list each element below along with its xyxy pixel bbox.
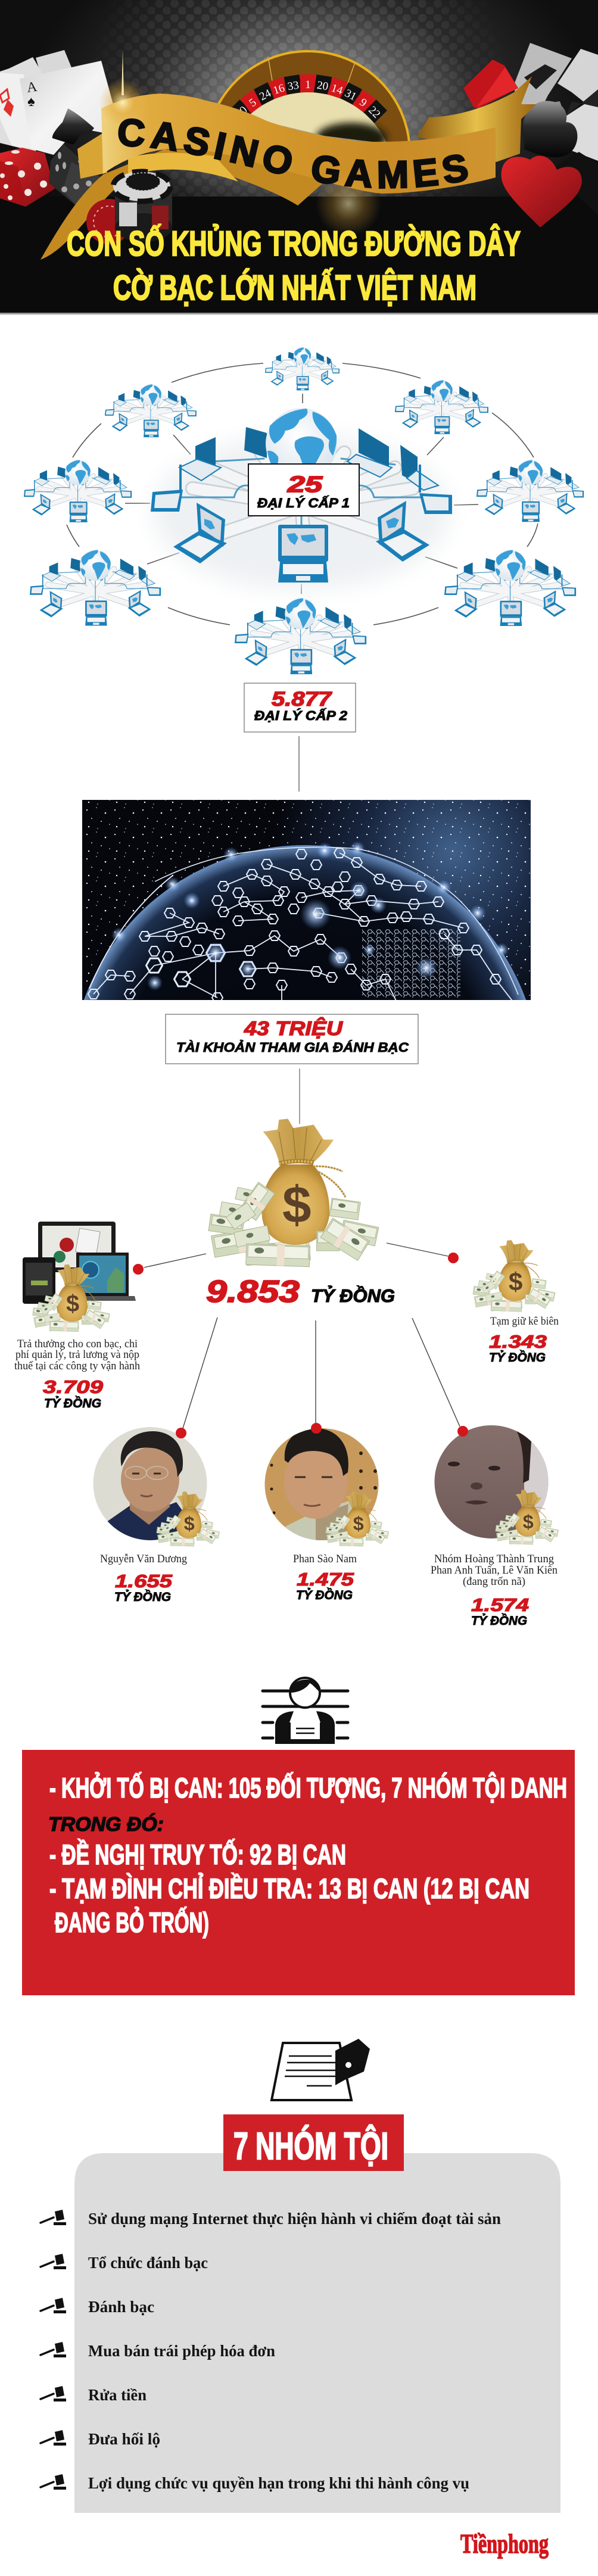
amount 3.709 — [43, 1376, 104, 1410]
payout caption: phí quản lý, trả lương và nộp — [15, 1348, 139, 1361]
total amount — [206, 1275, 395, 1309]
satellite clusters — [24, 347, 584, 674]
dice — [0, 144, 101, 208]
red dot left — [133, 1264, 144, 1275]
red dot right — [448, 1253, 459, 1263]
box: 5.877 second level agents — [244, 683, 356, 732]
connector to globe image — [298, 736, 300, 792]
Nguyễn Văn Dương: Nguyễn Văn Dương — [100, 1553, 187, 1565]
box: 43 million accounts: TÀI KHOẢN THAM GIA ĐÁNH BẠC — [176, 1040, 409, 1055]
sevens and suits right — [463, 43, 598, 228]
Phan Sào Nam: 1.475 — [297, 1569, 354, 1590]
box: 25 first level agents — [248, 464, 359, 516]
branch connectors — [144, 1243, 460, 1428]
box: 5.877 second level agents: 5.877 — [272, 688, 332, 711]
Hoàng Thành Trung group: TỶ ĐỒNG — [471, 1613, 527, 1628]
panel: charges — [22, 1750, 575, 1995]
amount 1.343: 1.343 — [489, 1331, 547, 1352]
small money bag — [326, 1491, 389, 1546]
amount 3.709: 3.709 — [43, 1376, 104, 1397]
icon: document and pen — [272, 2039, 370, 2100]
portrait: Hoàng Thành Trung — [432, 1424, 559, 1544]
item 6 — [41, 2430, 160, 2448]
Phan Sào Nam: Phan Sào Nam — [293, 1553, 357, 1565]
portrait: Phan Sào Nam — [262, 1423, 389, 1546]
roulette wheel: 16 — [272, 82, 286, 97]
box: 43 million accounts: 43 TRIỆU — [244, 1017, 343, 1039]
casino chips — [86, 172, 172, 244]
amount 1.343: TỶ ĐỒNG — [489, 1350, 546, 1365]
roulette wheel: 22 — [366, 104, 383, 121]
item 3: Đánh bạc — [88, 2298, 154, 2316]
connector to money bag — [299, 1069, 300, 1124]
box: 25 first level agents: ĐẠI LÝ CẤP 1 — [257, 496, 350, 510]
ribbon back sections — [41, 76, 536, 260]
crime list — [41, 2210, 501, 2492]
roulette wheel: 9 — [357, 96, 369, 110]
Nguyễn Văn Dương: 1.655 — [115, 1571, 173, 1591]
roulette wheel: 20 — [316, 79, 329, 93]
item 1: Sử dụng mạng Internet thực hiện hành vi chiếm đoạt tài sản — [88, 2210, 501, 2228]
Nguyễn Văn Dương — [100, 1553, 187, 1604]
glowing nodes — [111, 841, 509, 990]
playing cards left — [0, 50, 113, 155]
money bag right — [473, 1240, 555, 1312]
headline — [67, 225, 521, 307]
red dot — [176, 1428, 186, 1438]
hexagon nodes — [88, 848, 501, 1002]
ribbon glow — [99, 79, 147, 126]
roulette wheel: 10 — [233, 104, 250, 121]
playing cards left: A — [26, 79, 39, 96]
box: 5.877 second level agents: ĐẠI LÝ CẤP 2 — [254, 708, 348, 723]
payout caption: thuế tại các công ty vận hành — [14, 1360, 140, 1372]
central money bag — [208, 1119, 379, 1267]
roulette wheel: 5 — [247, 96, 258, 110]
roulette wheel: 24 — [257, 87, 273, 103]
total amount: TỶ ĐỒNG — [311, 1285, 395, 1306]
red dot — [457, 1426, 468, 1437]
casino games text: CASINO GAMES — [118, 118, 468, 189]
panel: seven groups of crimes — [41, 2114, 560, 2513]
Hoàng Thành Trung group: (đang trốn nã) — [463, 1575, 525, 1588]
item 3 — [41, 2298, 154, 2316]
seized caption: Tạm giữ kê biên — [490, 1315, 559, 1328]
panel: charges: - ĐỀ NGHỊ TRUY TỐ: 92 BỊ CAN — [49, 1839, 346, 1870]
Hoàng Thành Trung group: 1.574 — [471, 1594, 529, 1615]
box: 43 million accounts — [166, 1014, 418, 1064]
subheading: TRONG ĐÓ: — [48, 1813, 164, 1835]
amount 3.709: TỶ ĐỒNG — [44, 1396, 101, 1410]
total amount: 9.853 — [206, 1275, 300, 1309]
item 5: Rửa tiền — [88, 2386, 147, 2404]
heading: 7 NHÓM TỘI — [233, 2124, 388, 2167]
logo: Tiền Phong: Tiềnphong — [460, 2528, 549, 2559]
payout caption: Trả thưởng cho con bạc, chi — [17, 1338, 138, 1350]
Phan Sào Nam — [293, 1553, 357, 1602]
box: 25 first level agents: 25 — [287, 472, 323, 497]
item 7: Lợi dụng chức vụ quyền hạn trong khi thi hành công vụ — [88, 2474, 469, 2492]
roulette wheel — [218, 50, 410, 142]
small money bag — [157, 1491, 220, 1546]
playing cards left: ♠ — [27, 94, 35, 110]
panel: charges: ĐANG BỎ TRỐN) — [55, 1907, 209, 1938]
item 5 — [41, 2386, 147, 2404]
Hoàng Thành Trung group: Phan Anh Tuấn, Lê Văn Kiên — [431, 1564, 557, 1577]
heading — [223, 2114, 404, 2171]
Nguyễn Văn Dương: TỶ ĐỒNG — [114, 1590, 171, 1604]
icon: mugshot — [263, 1678, 348, 1744]
connecting arcs — [67, 363, 538, 625]
roulette wheel: 1 — [305, 79, 311, 91]
ribbon front — [101, 94, 496, 194]
portrait: Nguyễn Văn Dương — [89, 1424, 220, 1546]
item 2: Tổ chức đánh bạc — [88, 2254, 208, 2272]
Hoàng Thành Trung group: Nhóm Hoàng Thành Trung — [434, 1553, 554, 1565]
Hoàng Thành Trung group — [431, 1553, 557, 1628]
small money bag — [496, 1490, 559, 1544]
network diagram — [24, 347, 584, 732]
names and amounts — [100, 1553, 557, 1628]
amount 1.343 — [489, 1331, 547, 1365]
roulette wheel: 33 — [286, 79, 300, 93]
spade ornament — [52, 108, 94, 144]
money bag left — [33, 1264, 110, 1332]
links — [89, 847, 518, 1001]
header banner — [0, 0, 598, 314]
item 6: Đưa hối lộ — [88, 2430, 160, 2448]
payout caption — [14, 1338, 140, 1372]
devices with casino screens — [23, 1222, 136, 1304]
item 4: Mua bán trái phép hóa đơn — [88, 2342, 275, 2360]
global network photo — [82, 800, 531, 1000]
central network cluster — [151, 408, 452, 583]
soft platform shadow — [152, 435, 450, 590]
roulette wheel: 31 — [342, 87, 359, 103]
red dot — [311, 1423, 322, 1434]
Phan Sào Nam: TỶ ĐỒNG — [296, 1588, 353, 1602]
roulette wheel: 14 — [329, 82, 344, 97]
